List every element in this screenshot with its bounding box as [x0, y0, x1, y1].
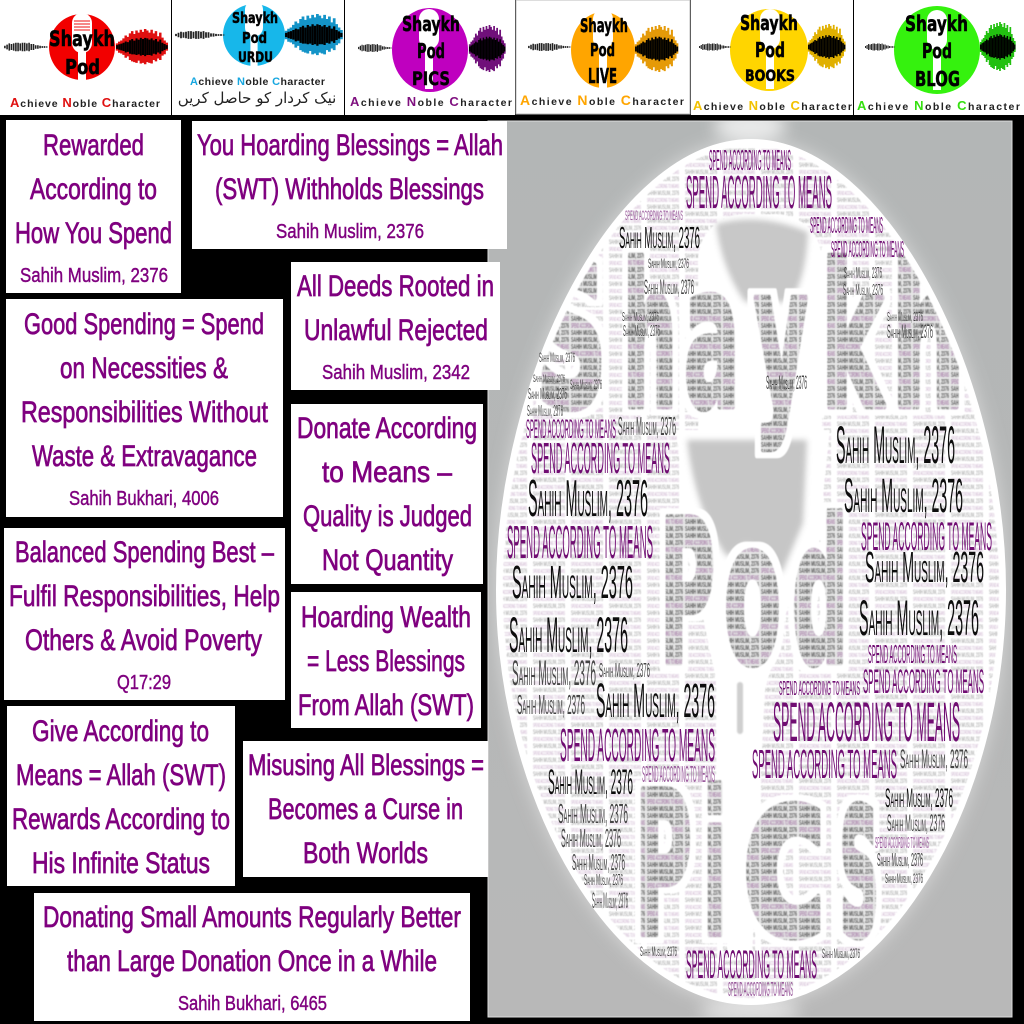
logo tile: Shaykh Pod Live	[516, 0, 690, 114]
large cloud words: Sahih Muslim, 2376	[618, 411, 676, 441]
card: balanced spending: Balanced Spending Best –	[15, 536, 274, 569]
large cloud words: SPEND ACCORDING TO MEANS	[526, 414, 616, 444]
card: rewarded according to how you spend: Rewarded	[43, 129, 144, 162]
card: deeds rooted in unlawful: All Deeds Rooted in	[297, 270, 494, 303]
large cloud words: Sahih Muslim, 2376	[584, 872, 623, 889]
card: donating small amounts: Donating Small Amounts Regularly Better	[43, 901, 461, 934]
large cloud words: Sahih Muslim, 2376	[843, 282, 883, 299]
card: good spending: Sahih Bukhari, 4006	[69, 488, 219, 510]
background word: Pod: P	[660, 478, 715, 709]
large cloud words: Sahih Muslim, 2376	[561, 823, 621, 853]
large cloud words: Sahih Muslim, 2376	[517, 689, 585, 720]
card: hoarding wealth	[291, 592, 481, 728]
logo tile: Shaykh Pod Pics: Pod	[417, 39, 445, 63]
logo tile: Shaykh Pod Blog: Pod	[922, 39, 952, 63]
large cloud words: Sahih Muslim, 2376	[527, 403, 563, 420]
background word: Pod	[659, 502, 850, 672]
logo tile: Shaykh Pod Books	[691, 0, 853, 115]
logo tile: Shaykh Pod Urdu: Pod	[242, 29, 267, 47]
card: good spending: Waste & Extravagance	[32, 440, 257, 473]
logo tile: Shaykh Pod Books: Achieve Noble Character	[693, 98, 852, 113]
large cloud words: Sahih Muslim, 2376	[596, 675, 715, 728]
card: give according to means: Rewards According to	[12, 803, 230, 836]
card: give according to means: His Infinite Status	[32, 847, 210, 880]
logo words knocked out of the disc: d	[792, 478, 848, 709]
logo tile: Shaykh Pod: Achieve Noble Character	[10, 95, 160, 110]
large cloud words: Sahih Muslim, 2376	[572, 849, 625, 875]
logo strip	[0, 0, 1024, 115]
texture: tiny repeated words	[503, 146, 999, 998]
large cloud words: Sahih Muslim, 2376	[844, 265, 882, 282]
logo tile: Shaykh Pod Books: BOOKS	[745, 66, 795, 85]
logo tile: Shaykh Pod Blog	[854, 0, 1024, 115]
logo tile: Shaykh Pod Live: Achieve Noble Character	[520, 92, 684, 108]
card: hoarding blessings: Sahih Muslim, 2376	[276, 221, 424, 243]
large cloud words: Sahih Muslim, 2376	[528, 470, 648, 528]
logo tile: Shaykh Pod Urdu: Shaykh	[232, 9, 278, 27]
logo tile: Shaykh Pod: Shaykh	[49, 27, 115, 51]
large cloud words: Sahih Muslim, 2376	[885, 870, 923, 886]
card: misusing blessings	[243, 741, 488, 877]
large cloud words: SPEND ACCORDING TO MEANS	[642, 761, 715, 787]
logo words knocked out of the disc	[536, 222, 965, 989]
large cloud words: Sahih Muslim, 2376	[592, 888, 628, 913]
background word: Shaykh: k	[821, 222, 885, 453]
card: donate according to means: Not Quantity	[322, 544, 453, 577]
logo tile: Shaykh Pod	[0, 0, 171, 115]
card: good spending: Good Spending = Spend	[24, 308, 264, 341]
large cloud words: Sahih Muslim, 2376	[512, 654, 596, 693]
card: donate according to means: Quality is Judged	[303, 500, 472, 533]
large cloud words: Sahih Muslim, 2376	[539, 349, 575, 365]
large cloud words: SPEND ACCORDING TO MEANS	[728, 979, 793, 1001]
card: hoarding blessings: (SWT) Withholds Blessings	[215, 173, 484, 206]
large cloud words: Sahih Muslim, 2376	[509, 607, 628, 663]
logo tile: Shaykh Pod Live: Pod	[590, 40, 615, 61]
logo words knocked out of the disc: s	[840, 719, 878, 989]
card: give according to means: Give According to	[32, 715, 209, 748]
card: donate according to means: Donate According	[297, 412, 477, 445]
card: donating small amounts: than Large Donation Once in a While	[67, 945, 437, 978]
logo tile: Shaykh Pod Urdu: نیک کردار کو حاصل کریں	[178, 89, 336, 107]
card: hoarding blessings	[192, 121, 507, 249]
large cloud words: Sahih Muslim, 2376	[644, 276, 694, 299]
large cloud words: Sahih Muslim, 2376	[558, 798, 628, 829]
card: hoarding blessings: You Hoarding Blessings = Allah	[197, 129, 503, 162]
large cloud words: SPEND ACCORDING TO MEANS	[625, 207, 683, 223]
card: deeds rooted in unlawful: Sahih Muslim, 2342	[322, 362, 470, 384]
large cloud words: Sahih Muslim, 2376	[822, 945, 860, 961]
logo tile: Shaykh Pod Books: Pod	[755, 38, 785, 62]
logo tile: Shaykh Pod Urdu: URDU	[238, 50, 273, 66]
large cloud words: Sahih Muslim, 2376	[648, 255, 689, 271]
card: deeds rooted in unlawful: Unlawful Rejected	[304, 314, 488, 347]
card: misusing blessings: Misusing All Blessings =	[248, 749, 484, 782]
background word: Pics	[634, 774, 882, 944]
logo tile: Shaykh Pod Urdu: Achieve Noble Character	[190, 76, 325, 88]
card: balanced spending: Others & Avoid Poverty	[25, 624, 262, 657]
panel: word cloud image	[488, 110, 1012, 1024]
background word: Shaykh	[536, 222, 965, 453]
card: donate according to means	[291, 404, 483, 584]
large cloud words: Sahih Muslim, 2376	[548, 763, 633, 802]
card: donating small amounts: Sahih Bukhari, 6465	[178, 993, 327, 1015]
logo tile: Shaykh Pod Live: LIVE	[588, 64, 617, 88]
large cloud words: Sahih Muslim, 2376	[622, 309, 659, 324]
logo tile: Shaykh Pod Books: Shaykh	[740, 11, 798, 35]
card: good spending: Responsibilities Without	[21, 396, 269, 429]
logo tile: Shaykh Pod Pics: Shaykh	[402, 12, 460, 36]
logo tile: Shaykh Pod Blog: Achieve Noble Character	[857, 98, 1020, 113]
card: deeds rooted in unlawful	[291, 262, 500, 390]
background word: Shaykh: S	[536, 222, 607, 453]
card: balanced spending: Fulfil Responsibilities, Help	[9, 580, 280, 613]
background word: Shaykh: h	[623, 222, 677, 453]
microphone silhouette	[676, 214, 830, 960]
background word: Pics: i	[703, 750, 727, 981]
background word: Pod: o	[724, 478, 781, 709]
card: give according to means: Means = Allah (SWT)	[16, 759, 226, 792]
large cloud words: Sahih Muslim, 2376	[623, 323, 660, 340]
card: rewarded according to how you spend	[6, 120, 181, 293]
logo tile: Shaykh Pod: Pod	[65, 55, 100, 79]
logo tile: Shaykh Pod Pics: PICS	[412, 68, 450, 90]
card: hoarding wealth: = Less Blessings	[307, 645, 465, 678]
card: balanced spending	[4, 528, 285, 700]
large cloud words: Sahih Muslim, 2376	[512, 556, 633, 608]
logo tile: Shaykh Pod Blog: Shaykh	[905, 12, 968, 36]
card: balanced spending: Q17:29	[117, 672, 171, 694]
card: rewarded according to how you spend: How You Spend	[15, 217, 172, 250]
large cloud words: Sahih Muslim, 2376	[570, 376, 602, 392]
card: hoarding wealth: From Allah (SWT)	[298, 689, 474, 722]
large cloud words: Sahih Muslim, 2376	[640, 943, 677, 959]
card: give according to means	[7, 706, 235, 886]
large cloud words: Sahih Muslim, 2376	[533, 373, 565, 385]
logo tile: Shaykh Pod Pics: Achieve Noble Character	[350, 94, 512, 109]
background word: Shaykh: y	[754, 222, 808, 453]
card: hoarding wealth: Hoarding Wealth	[301, 601, 471, 634]
background word: Shaykh: a	[684, 222, 740, 453]
card: good spending	[6, 299, 283, 517]
large cloud words	[507, 145, 992, 1001]
large cloud words: Sahih Muslim, 2376	[887, 309, 923, 324]
card: misusing blessings: Both Worlds	[303, 837, 428, 870]
large cloud words: Sahih Muslim, 2376	[528, 386, 567, 403]
card: misusing blessings: Becomes a Curse in	[268, 793, 463, 826]
large cloud words: Sahih Muslim, 2376	[619, 220, 700, 255]
logo tile: Shaykh Pod Pics	[345, 0, 515, 115]
logo tile: Shaykh Pod Urdu	[172, 0, 344, 115]
large cloud words: Sahih Muslim, 2376	[599, 660, 650, 682]
background word: Pics: P	[635, 750, 692, 981]
background word: Pics: c	[742, 719, 828, 989]
logo tile: Shaykh Pod Blog: BLOG	[915, 67, 960, 91]
logo tile: Shaykh Pod Live: Shaykh	[580, 15, 628, 37]
card: donate according to means: to Means –	[322, 456, 452, 489]
card: donating small amounts	[34, 893, 470, 1021]
card: rewarded according to how you spend: According to	[30, 173, 157, 206]
card: rewarded according to how you spend: Sahih Muslim, 2376	[20, 265, 168, 287]
card: good spending: on Necessities &	[60, 352, 228, 385]
large cloud words: Sahih Muslim, 2376	[766, 373, 807, 394]
